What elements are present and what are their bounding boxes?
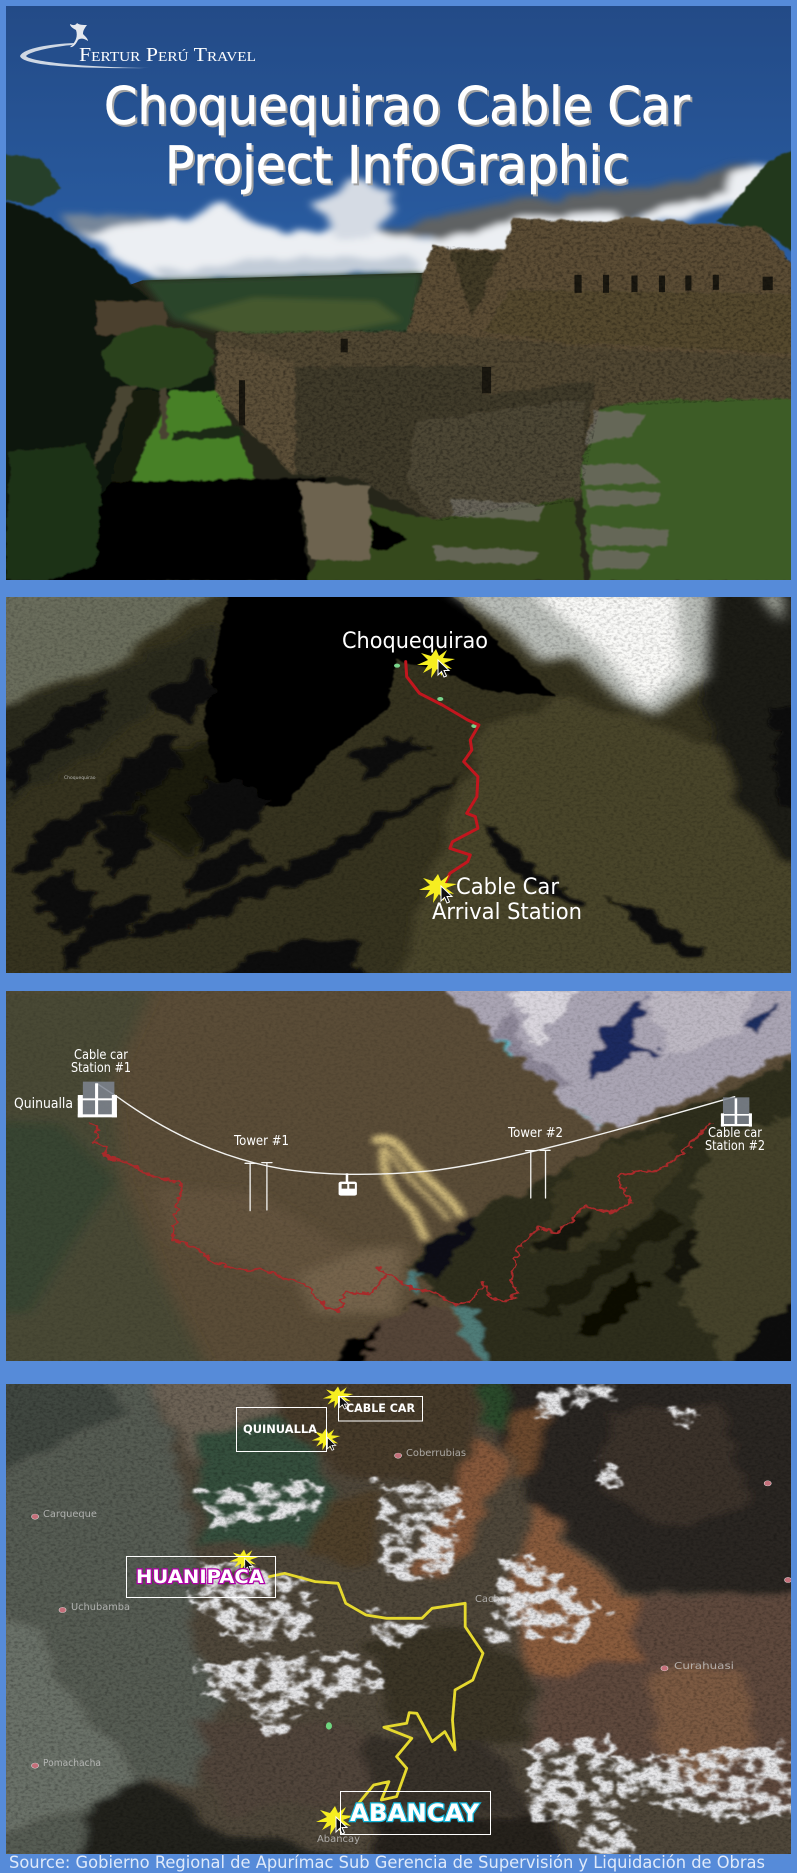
label box: Quinualla <box>236 1408 326 1452</box>
label: Cable Car Arrival Station: Arrival Station <box>432 900 582 925</box>
title: Project InfoGraphic <box>165 136 629 196</box>
gondola icon <box>339 1173 357 1196</box>
label: Quinualla: Quinualla <box>14 1096 73 1112</box>
marker star: Choquequirao <box>417 649 455 678</box>
label box: Cable Car: CABLE CAR <box>346 1401 415 1415</box>
map place names <box>43 1448 734 1845</box>
title: Choquequirao Cable Car <box>104 77 691 137</box>
source note: Source: Gobierno Regional de Apurímac Sub Gerencia de Supervisión y Liquidación de Obras <box>9 1853 765 1872</box>
panel: cable car route diagram <box>0 980 797 1380</box>
tiny map label: Choquequirao <box>64 775 96 781</box>
map place names: Cachora <box>475 1594 516 1605</box>
title <box>104 77 691 196</box>
label: Cable car Station 2: Station #2 <box>705 1139 765 1154</box>
marker star: Huanipaca <box>230 1550 258 1571</box>
dark streak shadows <box>5 657 797 990</box>
map place names: Abancay <box>317 1834 360 1845</box>
label: Cable car Station 2: Cable car <box>708 1126 763 1141</box>
station 2 icon <box>721 1097 752 1127</box>
station 1 icon <box>78 1082 117 1117</box>
map place markers <box>32 1453 792 1768</box>
marker star: Quinualla <box>312 1428 340 1450</box>
label: Cable car Station 2 <box>705 1126 765 1154</box>
label: Cable car Station 1: Cable car <box>74 1048 129 1063</box>
satellite terrain <box>0 980 797 1380</box>
map place names: Carqueque <box>43 1509 97 1520</box>
satellite map terrain <box>0 1370 797 1873</box>
map place names: Curahuasi <box>674 1661 734 1672</box>
satellite terrain <box>0 590 797 990</box>
label: Tower 1: Tower #1 <box>233 1134 289 1149</box>
tower 1 <box>245 1163 272 1211</box>
label: Choquequirao: Choquequirao <box>342 629 488 654</box>
label: Cable Car Arrival Station <box>432 877 580 920</box>
ground base <box>130 264 791 580</box>
photo: mountain ruins landscape <box>0 0 797 602</box>
logo: Fertur Peru Travel <box>20 23 256 68</box>
label box: Huanipaca <box>126 1556 276 1598</box>
white cloud fragments <box>198 1383 797 1857</box>
green location dot <box>326 1722 332 1730</box>
yellow earth scar <box>376 1139 460 1237</box>
panel: regional road map to Abancay <box>0 1370 797 1873</box>
label box: Abancay: ABANCAY <box>350 1799 480 1827</box>
label box: Cable Car <box>338 1396 422 1421</box>
label box: Huanipaca: HUANIPACA <box>136 1566 264 1588</box>
panel: Choquequirao ruins photo with title <box>0 0 797 602</box>
label: Cable Car Arrival Station: Cable Car <box>456 875 560 900</box>
map place names: Uchubamba <box>71 1602 130 1613</box>
label: Tower 2: Tower #2 <box>507 1126 563 1141</box>
road route in yellow <box>269 1573 483 1807</box>
map place names: Coberrubias <box>406 1448 466 1459</box>
label box: Abancay <box>340 1792 490 1834</box>
marker star: arrival station <box>419 874 457 903</box>
logo: Fertur Peru Travel: Fertur Perú Travel <box>79 44 256 66</box>
label box: Quinualla: QUINUALLA <box>243 1422 317 1436</box>
marker star: cable car <box>323 1386 353 1409</box>
cable line <box>97 1083 735 1174</box>
tower 2 <box>526 1150 550 1198</box>
panel: Choquequirao trail satellite view <box>0 590 797 990</box>
label: Cable car Station 1: Station #1 <box>71 1061 131 1076</box>
marker star: Abancay <box>316 1806 354 1835</box>
map place names: Pomachacha <box>43 1758 101 1769</box>
trail route in red <box>406 662 479 883</box>
hiking trail in red <box>92 1122 712 1312</box>
label: Cable car Station 1 <box>71 1048 131 1076</box>
